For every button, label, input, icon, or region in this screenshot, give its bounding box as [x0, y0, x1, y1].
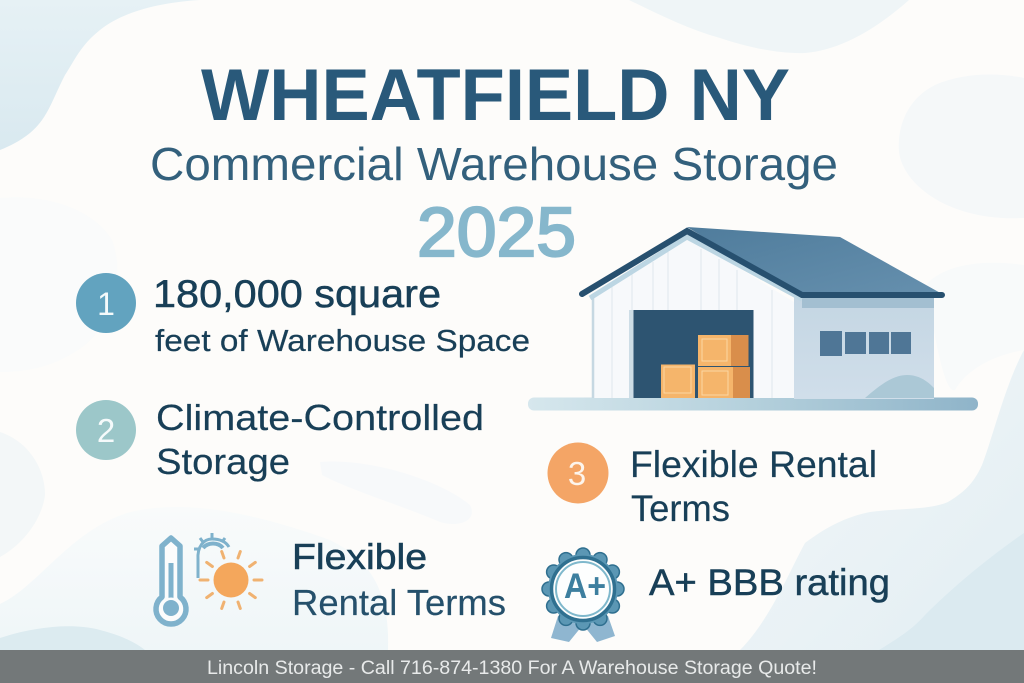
item 1: [76, 273, 530, 358]
badge 1: [76, 273, 136, 333]
title: WHEATFIELD NY: [201, 55, 790, 136]
footer bar: Lincoln Storage - Call 716-874-1380 For A Warehouse Storage Quote!: [207, 658, 817, 679]
item 3: [548, 442, 877, 529]
rating text: A+ BBB rating: [649, 562, 890, 603]
gear: [194, 533, 229, 578]
side wall: [794, 296, 934, 399]
item 4 text: Flexible: [292, 536, 427, 577]
ribbons: [551, 616, 582, 642]
badge 1: 1: [97, 286, 115, 322]
fascia: [582, 231, 942, 295]
sun: [200, 552, 262, 608]
thermometer: [156, 538, 186, 624]
item 2 text: Climate-Controlled: [156, 397, 484, 438]
year: 2025: [417, 193, 576, 271]
item 2 text: Storage: [156, 441, 290, 482]
boxes: [661, 335, 750, 398]
item 4 text: Rental Terms: [292, 582, 506, 623]
item 3 text: [630, 444, 877, 529]
item 4 text: [292, 536, 506, 623]
icon: A+ rating badge: A+: [564, 567, 606, 606]
subtitle: Commercial Warehouse Storage: [150, 138, 838, 190]
item 3 text: Flexible Rental: [630, 444, 877, 485]
badge 2: [76, 400, 136, 460]
badge 3: [548, 442, 608, 504]
item 2 text: [156, 397, 484, 482]
door: [629, 310, 753, 398]
footer bar: [0, 650, 1024, 683]
scalloped seal: [542, 548, 624, 630]
windows: [820, 331, 911, 356]
item 1 text: feet of Warehouse Space: [155, 323, 530, 358]
icon: A+ rating badge: [542, 548, 624, 642]
front wall: [593, 236, 794, 398]
item 2: [76, 397, 484, 482]
badge 2: 2: [97, 412, 115, 449]
item 3 text: Terms: [631, 488, 730, 529]
item 1 text: [153, 273, 530, 358]
icon: thermometer and sun: [156, 533, 262, 624]
badge 3: 3: [568, 455, 586, 492]
warehouse illustration: [528, 227, 978, 410]
roof: [687, 227, 944, 295]
ground: [528, 398, 978, 410]
item 1 text: 180,000 square: [153, 273, 441, 316]
